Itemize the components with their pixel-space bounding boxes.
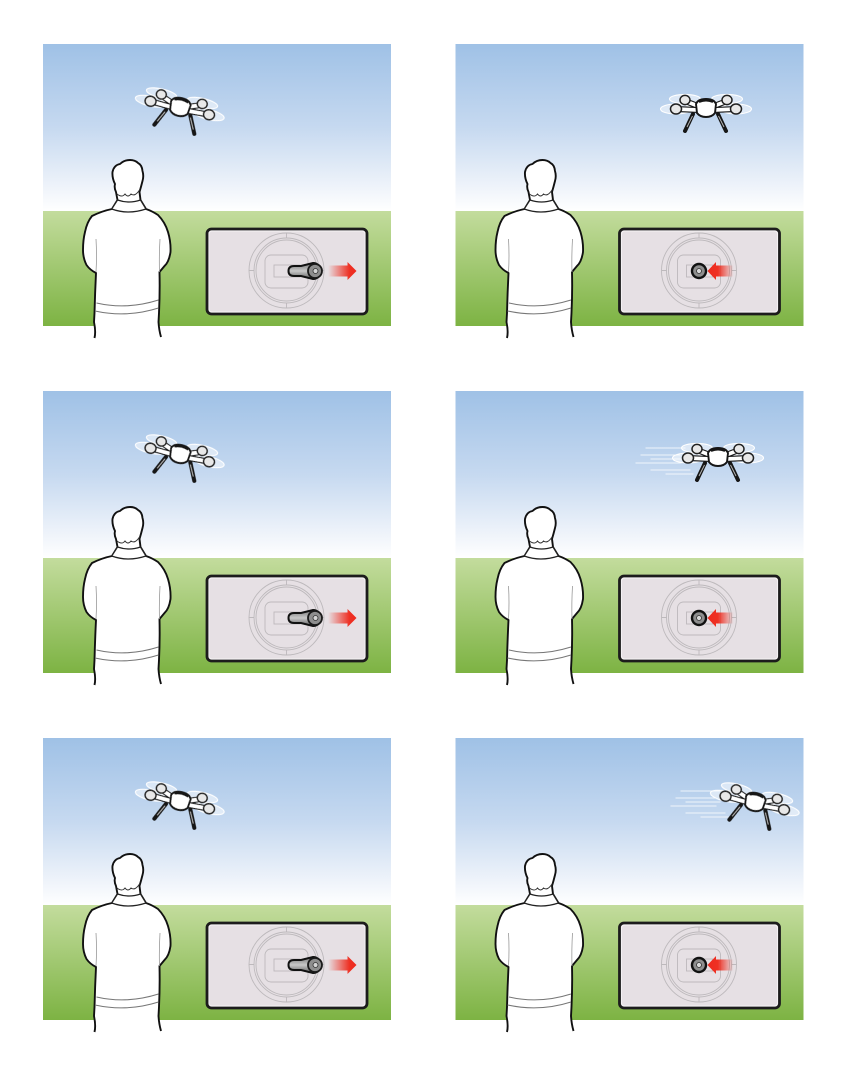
control stick centred (692, 264, 706, 278)
sky and grass scene (456, 391, 804, 673)
drone tilted forward (130, 84, 227, 140)
sky and grass scene (43, 391, 391, 673)
controller pad (207, 923, 367, 1008)
sky and grass scene (456, 44, 804, 326)
controller pad (620, 923, 780, 1008)
panel: row 1 left, stick right (43, 44, 391, 338)
controller pad (620, 576, 780, 661)
sky and grass scene (456, 738, 804, 1020)
speed lines (670, 791, 728, 817)
person seen from behind (83, 507, 171, 685)
drone tilted forward (130, 431, 227, 487)
arrow: right (328, 609, 356, 627)
panel: row 1 right, stick centred (456, 44, 804, 338)
control stick centred (692, 611, 706, 625)
control stick pushed right (288, 263, 322, 279)
arrow: left (708, 956, 734, 974)
person seen from behind (83, 854, 171, 1032)
panel: row 3 left, stick right (43, 738, 391, 1032)
panel: row 2 right, stick centred, drone moving (456, 391, 804, 685)
controller pad (620, 229, 780, 314)
person seen from behind (496, 160, 583, 338)
control stick centred (692, 958, 706, 972)
arrow: left (708, 262, 734, 280)
sky and grass scene (43, 44, 391, 326)
arrow: right (328, 262, 356, 280)
person seen from behind (496, 507, 583, 685)
panel: row 2 left, stick right (43, 391, 391, 685)
controller pad (207, 229, 367, 314)
arrow: left (708, 609, 734, 627)
arrow: right (328, 956, 356, 974)
person seen from behind (496, 854, 583, 1032)
person seen from behind (83, 160, 171, 338)
drone tilted forward (705, 779, 802, 835)
control stick pushed right (288, 610, 322, 626)
sky and grass scene (43, 738, 391, 1020)
drone level (672, 443, 764, 480)
control stick pushed right (288, 957, 322, 973)
controller pad (207, 576, 367, 661)
speed lines (636, 448, 694, 474)
drone tilted forward (130, 778, 227, 834)
panel: row 3 right, stick centred, drone tilted and moving (456, 738, 804, 1032)
drone level (660, 94, 752, 131)
